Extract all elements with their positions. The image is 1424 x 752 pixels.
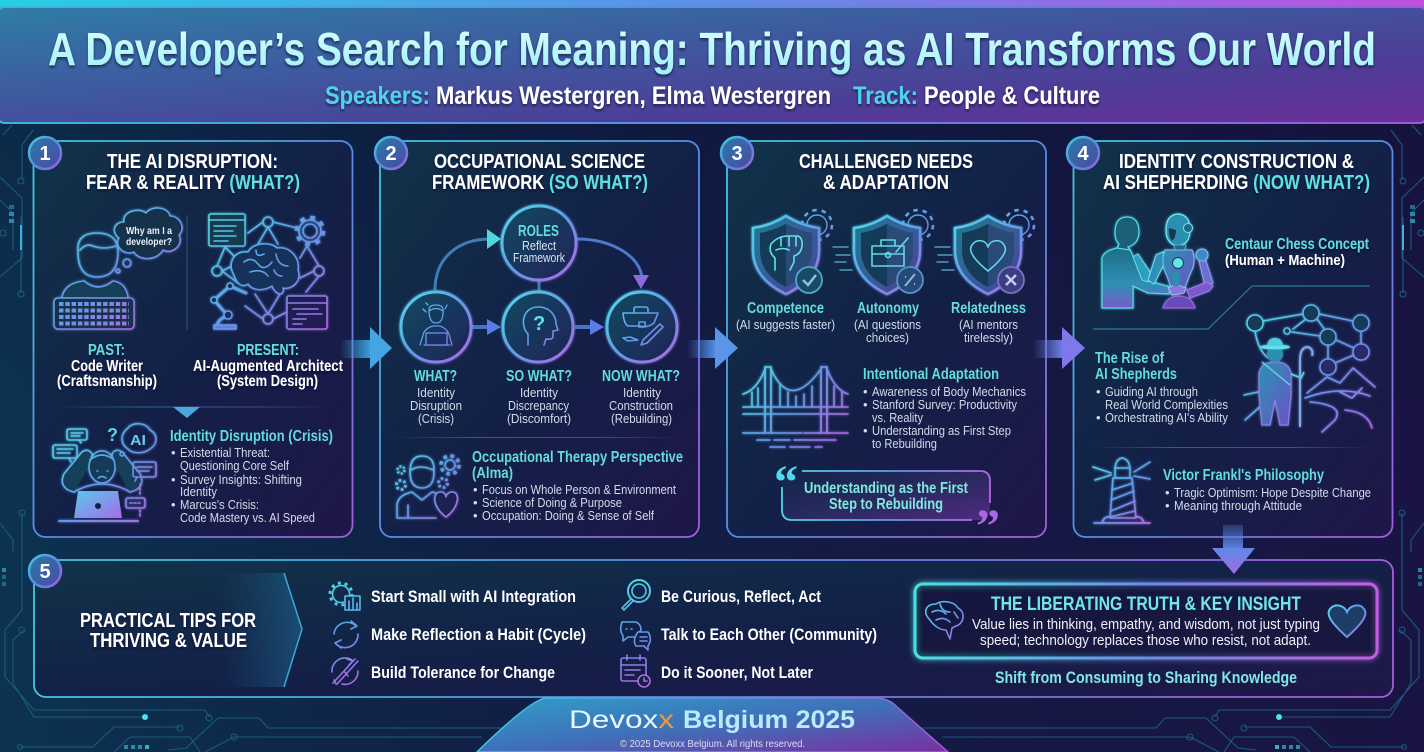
- present label: PRESENT:: [237, 342, 299, 359]
- badge 4: 4: [1077, 143, 1089, 165]
- past label: [57, 342, 157, 390]
- key insight box: speed; technology replaces those who resist, not adapt.: [980, 632, 1311, 649]
- framework labels: (Discomfort): [507, 411, 571, 426]
- framework labels: Identity: [623, 385, 661, 400]
- heading: FRAMEWORK (SO WHAT?): [432, 172, 648, 194]
- speakers and track line: Markus Westergren, Elma Westergren: [436, 82, 831, 110]
- past label: (Craftsmanship): [57, 373, 157, 390]
- panel 2: occupational science framework: [375, 137, 699, 537]
- text: identity disruption: Identity Disruption (Crisis): [170, 428, 333, 445]
- divider between past and present: [186, 215, 188, 330]
- icon: AI brain network with robot arm: [209, 214, 327, 329]
- present label: (System Design): [217, 373, 318, 390]
- text: rise of AI shepherds: The Rise of: [1095, 350, 1165, 367]
- icon: calendar and clock: [621, 655, 650, 687]
- framework labels: Construction: [609, 398, 673, 413]
- text: occupational therapy perspective: Science of Doing & Purpose: [482, 495, 622, 510]
- badge 1: 1: [39, 143, 51, 165]
- text: rise of AI shepherds: •: [1096, 384, 1101, 399]
- crisis laptop: [74, 491, 122, 518]
- icon: suspension bridge: [743, 367, 848, 447]
- quote callout: [774, 456, 1000, 553]
- icon: autonomy shield with briefcase: [833, 210, 933, 294]
- tips column 2: Do it Sooner, Not Later: [661, 663, 813, 682]
- text: identity disruption: [170, 428, 333, 525]
- arrow: panel 4 down to panel 5: [1212, 525, 1255, 574]
- brand name: [569, 706, 855, 734]
- text: rise of AI shepherds: •: [1096, 410, 1101, 425]
- quote callout: ”: [976, 500, 1000, 553]
- text: centaur chess: (Human + Machine): [1225, 252, 1345, 269]
- text: occupational therapy perspective: •: [473, 495, 478, 510]
- heading: IDENTITY CONSTRUCTION &: [1119, 151, 1354, 173]
- needs labels: (AI questions: [854, 317, 921, 332]
- key insight box: [915, 584, 1377, 658]
- icon: AI node network: [1247, 305, 1369, 375]
- framework labels: (Rebuilding): [611, 411, 672, 426]
- icon: occupational therapist with gears and heart: [396, 456, 459, 518]
- AI and question mark: AI: [130, 432, 146, 449]
- speakers and track line: People & Culture: [924, 82, 1100, 110]
- icon: relatedness shield with heart: [935, 210, 1034, 294]
- text: rise of AI shepherds: Orchestrating AI's Ability: [1105, 410, 1228, 425]
- roles circle: Framework: [513, 250, 565, 265]
- needs labels: (AI suggests faster): [736, 317, 835, 332]
- text: Victor Frankl: •: [1165, 485, 1170, 500]
- tips column 1: Build Tolerance for Change: [371, 663, 555, 682]
- tips column 2: Be Curious, Reflect, Act: [661, 587, 821, 606]
- text: identity disruption: •: [171, 497, 176, 512]
- badge 3: [721, 137, 753, 169]
- flow arrows: [435, 229, 649, 335]
- text: Victor Frankl: Tragic Optimism: Hope Despite Change: [1174, 485, 1371, 500]
- icon: stressed developer at laptop: [53, 424, 156, 521]
- heading: THE AI DISRUPTION:: [107, 151, 278, 173]
- heading: & ADAPTATION: [823, 172, 949, 194]
- text: identity disruption: •: [171, 472, 176, 487]
- framework labels: [410, 368, 680, 426]
- needs labels: Competence: [747, 300, 824, 317]
- text: rise of AI shepherds: Guiding AI through: [1105, 384, 1198, 399]
- icon: cycle arrows: [334, 621, 358, 648]
- heading: FEAR & REALITY (WHAT?): [86, 172, 300, 194]
- text: rise of AI shepherds: Real World Complexities: [1105, 397, 1228, 412]
- AI and question mark: [107, 425, 146, 449]
- arrow: panel 3 to 4: [1033, 327, 1085, 369]
- icon: chat bubbles: [621, 622, 650, 650]
- text: identity disruption: Survey Insights: Shifting: [180, 472, 302, 487]
- chevron banner with heading: [80, 573, 302, 687]
- text: rise of AI shepherds: [1095, 350, 1228, 425]
- heading: AI SHEPHERDING (NOW WHAT?): [1103, 172, 1370, 194]
- heading: [432, 151, 648, 194]
- framework labels: Discrepancy: [508, 398, 569, 413]
- down pointer divider: [53, 406, 333, 418]
- text: occupational therapy perspective: Focus on Whole Person & Environment: [482, 482, 676, 497]
- quote callout: “: [774, 456, 798, 509]
- icon: tolerance arrows: [332, 658, 358, 684]
- text: intentional adaptation: •: [863, 397, 868, 412]
- chevron banner with heading: THRIVING & VALUE: [90, 630, 247, 652]
- tips column 1: Start Small with AI Integration: [371, 587, 576, 606]
- text: occupational therapy perspective: [472, 449, 683, 523]
- tips column 1: Make Reflection a Habit (Cycle): [371, 625, 586, 644]
- text: identity disruption: Code Mastery vs. AI Speed: [180, 510, 315, 525]
- needs labels: [736, 300, 1026, 345]
- icon: lighthouse: [1093, 458, 1150, 523]
- speakers and track line: [325, 82, 1100, 110]
- heading: [1103, 151, 1370, 194]
- thought bubble text: [126, 225, 172, 248]
- arrow: panel 1 to 2: [340, 327, 392, 369]
- text: occupational therapy perspective: •: [473, 482, 478, 497]
- framework labels: Identity: [520, 385, 558, 400]
- text: Victor Frankl: [1163, 467, 1371, 513]
- present label: AI-Augmented Architect: [193, 358, 344, 375]
- brand name: Belgium 2025: [683, 706, 855, 734]
- heading: [86, 151, 300, 194]
- text: rise of AI shepherds: AI Shepherds: [1095, 366, 1177, 383]
- now what circle: [607, 292, 677, 362]
- roles circle: Reflect: [522, 238, 556, 253]
- text: Victor Frankl: Victor Frankl's Philosophy: [1163, 467, 1324, 484]
- text: occupational therapy perspective: (Alma): [472, 465, 513, 482]
- panel 5: practical tips: [29, 555, 1393, 697]
- text: intentional adaptation: to Rebuilding: [872, 436, 937, 451]
- badge 1: [29, 137, 61, 169]
- roles circle: [502, 206, 576, 280]
- needs labels: tirelessly): [964, 330, 1013, 345]
- key insight box: THE LIBERATING TRUTH & KEY INSIGHT: [991, 594, 1301, 615]
- brand name: Devox x: [569, 706, 675, 734]
- copyright: © 2025 Devoxx Belgium. All rights reserved.: [620, 739, 805, 750]
- quote callout: Understanding as the First: [804, 480, 969, 497]
- icon: magnifier: [622, 580, 650, 610]
- arrow: panel 2 to 3: [687, 327, 738, 369]
- icon: gear and chart: [330, 583, 360, 610]
- what circle: [401, 292, 471, 362]
- quote callout: Step to Rebuilding: [829, 496, 943, 513]
- chevron banner with heading: PRACTICAL TIPS FOR: [80, 610, 256, 632]
- text: identity disruption: Existential Threat:: [180, 445, 270, 460]
- needs labels: Relatedness: [951, 300, 1026, 317]
- icon: heart: [1329, 605, 1365, 637]
- heading: [799, 151, 973, 194]
- badge 4: [1067, 137, 1099, 169]
- AI and question mark: ?: [107, 425, 118, 445]
- present label: [193, 342, 344, 390]
- heading: CHALLENGED NEEDS: [799, 151, 973, 173]
- so what circle: [503, 292, 573, 362]
- text: identity disruption: •: [171, 445, 176, 460]
- tips column 2: [621, 580, 877, 687]
- heading: OCCUPATIONAL SCIENCE: [434, 151, 645, 173]
- text: identity disruption: Marcus's Crisis:: [180, 497, 259, 512]
- key insight box: Value lies in thinking, empathy, and wisdom, not just typing: [972, 616, 1320, 633]
- key insight footnote: Shift from Consuming to Sharing Knowledge: [995, 668, 1297, 687]
- text: occupational therapy perspective: Occupational Therapy Perspective: [472, 449, 683, 466]
- roles circle: ROLES: [518, 223, 559, 240]
- badge 2: 2: [385, 143, 397, 165]
- past label: PAST:: [88, 342, 125, 359]
- framework labels: (Crisis): [418, 411, 454, 426]
- text: centaur chess: [1225, 236, 1370, 269]
- icon: developer at keyboard with thought bubble: [54, 208, 182, 329]
- needs labels: Autonomy: [857, 300, 919, 317]
- text: intentional adaptation: Intentional Adaptation: [863, 366, 999, 383]
- panel 3: challenged needs and adaptation: [721, 137, 1046, 553]
- text: Victor Frankl: •: [1165, 498, 1170, 513]
- circuit board traces left: [0, 125, 505, 752]
- thought bubble text: Why am I a: [126, 225, 172, 237]
- text: centaur chess: Centaur Chess Concept: [1225, 236, 1370, 253]
- text: identity disruption: Identity: [180, 484, 217, 499]
- text: Victor Frankl: Meaning through Attitude: [1174, 498, 1302, 513]
- text: occupational therapy perspective: •: [473, 508, 478, 523]
- panel 4: identity construction and AI shepherding: [1067, 137, 1392, 537]
- speakers and track line: Track:: [853, 82, 918, 110]
- speakers and track line: Speakers:: [325, 82, 430, 110]
- circuit board traces right: [919, 125, 1424, 752]
- tips column 2: Talk to Each Other (Community): [661, 625, 877, 644]
- text: intentional adaptation: •: [863, 423, 868, 438]
- text: occupational therapy perspective: Occupation: Doing & Sense of Self: [482, 508, 654, 523]
- tips column 1: [330, 583, 586, 684]
- icon: human and robot centaur: [1102, 214, 1213, 308]
- badge 3: 3: [731, 143, 743, 165]
- text: intentional adaptation: •: [863, 384, 868, 399]
- needs labels: choices): [866, 330, 909, 345]
- badge 5: [29, 555, 61, 587]
- badge 5: 5: [39, 561, 51, 583]
- framework labels: WHAT?: [414, 368, 457, 385]
- text: intentional adaptation: Stanford Survey: Productivity: [872, 397, 1017, 412]
- thought bubble text: developer?: [126, 236, 172, 248]
- footer plate: [477, 698, 948, 752]
- badge 2: [375, 137, 407, 169]
- framework labels: NOW WHAT?: [602, 368, 680, 385]
- icon: competence shield with fist: [753, 210, 832, 294]
- text: identity disruption: Questioning Core Self: [180, 458, 289, 473]
- so what circle: ?: [533, 313, 545, 335]
- framework labels: Disruption: [410, 398, 462, 413]
- text: intentional adaptation: Awareness of Body Mechanics: [872, 384, 1026, 399]
- needs labels: (AI mentors: [959, 317, 1018, 332]
- icon: brain: [926, 602, 963, 639]
- framework labels: Identity: [417, 385, 455, 400]
- text: intentional adaptation: vs. Reality: [872, 410, 923, 425]
- past label: Code Writer: [71, 358, 143, 375]
- framework labels: SO WHAT?: [506, 368, 572, 385]
- icon: shepherd in mountains: [1244, 338, 1375, 432]
- header banner: [0, 0, 1424, 123]
- text: intentional adaptation: Understanding as First Step: [872, 423, 1011, 438]
- panel 1: the AI disruption: [29, 137, 352, 537]
- text: intentional adaptation: [863, 366, 1026, 451]
